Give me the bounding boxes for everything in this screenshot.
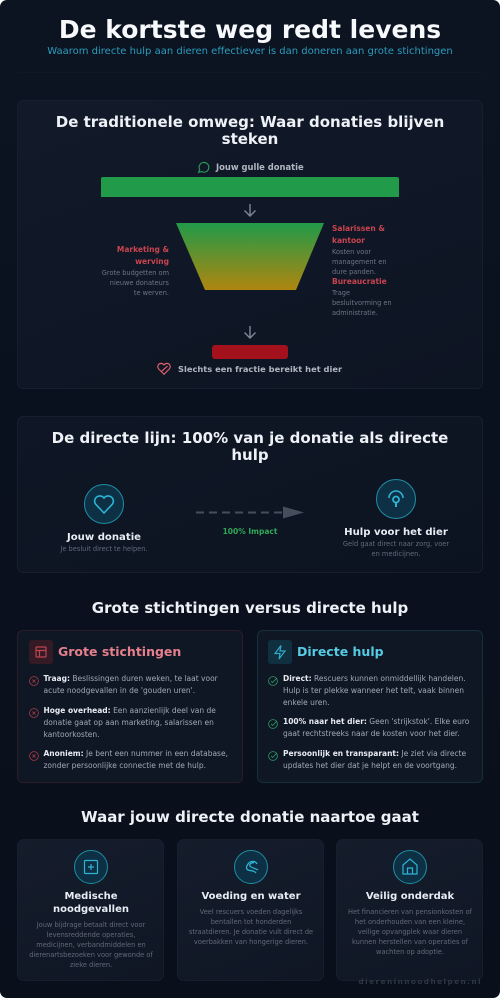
card: medical emergencies: levensreddende operaties, (47, 930, 135, 938)
card: food and water (177, 839, 324, 981)
icon: heart in circle (84, 484, 124, 524)
text: money goes directly: en medicijnen. (372, 550, 420, 558)
item: high overhead: kantoorkosten. (44, 730, 100, 739)
subtitle: Waarom directe hulp aan dieren effectiever is dan doneren aan grote stichtingen (47, 46, 453, 57)
card title: Veilig onderdak (366, 891, 454, 902)
heading: direct help: Directe hulp (297, 644, 384, 659)
card: safe shelter (336, 839, 483, 981)
item: high overhead (29, 706, 216, 739)
heading: direct line (52, 429, 448, 464)
icon: location in circle (376, 479, 416, 519)
callout: salaries and office: dure panden. (332, 268, 376, 276)
card title: Medische (64, 891, 118, 902)
item: high overhead: donatie gaat op aan marketing, salarissen en (44, 718, 214, 727)
card: safe shelter: wachten op adoptie. (376, 948, 444, 956)
callout: salaries and office: kantoor (332, 236, 365, 245)
card title: Voeding en water (201, 891, 301, 902)
remaining fraction bar (212, 345, 288, 359)
card: food and water: voerbakken van hongerige dieren. (194, 938, 308, 946)
callout: salaries and office: Salarissen & (332, 224, 385, 233)
watermark: diereninnoodhelpen.nl (358, 976, 482, 986)
label: your donation: Jouw donatie (67, 532, 141, 542)
icon: lightning bolt (268, 640, 292, 664)
callout: bureaucracy: Bureaucratie (332, 277, 387, 286)
card text: Jouw bijdrage betaalt direct voor (37, 920, 145, 928)
text: money goes directly: Geld gaat direct naar zorg, voer (343, 540, 449, 548)
callout: marketing: Grote budgetten om (102, 269, 169, 277)
icon: layout (29, 640, 53, 664)
card: medical emergencies: zieke dieren. (70, 960, 112, 968)
icon: broken heart (157, 362, 171, 375)
icon: food and water (234, 850, 268, 884)
card: medical emergencies: medicijnen, verbandmiddelen en (36, 940, 146, 948)
arrow: dashed impact arrow (196, 506, 304, 518)
card: medical emergencies: noodgevallen (53, 904, 129, 915)
card: safe shelter: het onderhouden van een kleine, (355, 918, 465, 926)
item: personal and transparent (268, 749, 466, 770)
callout: marketing (102, 245, 169, 297)
callout: bureaucracy: besluitvorming en (332, 299, 392, 307)
heading: direct line: hulp (231, 446, 269, 464)
funnel (176, 223, 324, 290)
item: direct: Hulp is ter plekke wanneer het telt, vaak binnen (283, 686, 464, 695)
full donation bar (101, 177, 399, 197)
callout: bureaucracy: administratie. (332, 309, 378, 317)
text: money goes directly (343, 540, 450, 558)
text: your decision: Je besluit direct te helpen. (60, 545, 148, 553)
callout: salaries and office (332, 224, 387, 276)
item: slow (29, 674, 218, 695)
item: slow: acute noodgevallen in de 'gouden uren'. (44, 686, 195, 695)
icon: speech bubble (198, 162, 210, 174)
heading: traditional detour: De traditionele omweg: Waar donaties blijven (56, 113, 444, 131)
item: slow: Traag: Beslissingen duren weken, te laat voor (44, 674, 218, 683)
callout: salaries and office: Kosten voor (332, 248, 371, 256)
card: medical emergencies: dierenartsbezoeken voor gewonde of (29, 950, 153, 958)
card: medical emergencies (17, 839, 164, 981)
panel: direct line (17, 416, 483, 573)
item: high overhead: Hoge overhead: Een aanzienlijk deel van de (44, 706, 216, 715)
heading: traditional detour (56, 113, 444, 148)
card text: Veel rescuers voeden dagelijks (200, 908, 302, 916)
label: help for the animal: Hulp voor het dier (344, 526, 448, 538)
arrow: down (244, 326, 256, 339)
card: safe shelter: veilige opvangplek waar dieren (358, 928, 462, 936)
card: safe shelter: kunnen herstellen van operaties of (352, 938, 468, 946)
panel: large charities (17, 630, 243, 783)
label: your donation: Jouw gulle donatie (216, 162, 304, 172)
item: personal and transparent: updates het dier dat je helpt en de voortgang. (283, 761, 457, 770)
heading: comparison: Grote stichtingen versus directe hulp (92, 598, 408, 616)
callout: marketing: te werven. (134, 289, 169, 297)
heading: large charities: Grote stichtingen (58, 644, 181, 659)
item: anonymous (29, 749, 228, 770)
heading: where donation goes: Waar jouw directe donatie naartoe gaat (81, 808, 419, 826)
item: direct (268, 674, 466, 707)
callout: marketing: werving (135, 257, 169, 266)
callout: marketing: Marketing & (117, 245, 169, 254)
label: only a fraction: Slechts een fractie bereikt het dier (178, 364, 342, 374)
item: 100% to the animal (268, 717, 469, 738)
callout: salaries and office: management en (332, 258, 387, 266)
panel: direct help (257, 630, 483, 783)
card text: Het financieren van pensionkosten of (348, 908, 472, 916)
card: food and water: bentallen tot honderden (211, 918, 291, 926)
heading: direct line: De directe lijn: 100% van je donatie als directe (52, 429, 448, 447)
card: food and water: straatdieren. Je donatie vult direct de (189, 928, 313, 936)
label: 100% impact: 100% Impact (223, 526, 277, 536)
item: anonymous: zonder persoonlijke connectie met de hulp. (44, 761, 206, 770)
heading: traditional detour: steken (222, 130, 278, 148)
icon: medical cross (74, 850, 108, 884)
callout: marketing: nieuwe donateurs (110, 279, 169, 287)
arrow: down (244, 204, 256, 217)
item: 100% to the animal: gaat rechtstreeks naar de kosten voor het dier. (283, 729, 460, 738)
title: De kortste weg redt levens (59, 15, 441, 44)
item: anonymous: Anoniem: Je bent een nummer in een database, (44, 749, 228, 758)
item: direct: enkele uren. (283, 698, 330, 707)
callout: bureaucracy: Trage (332, 289, 350, 297)
callout: bureaucracy (332, 277, 392, 317)
item: direct: Direct: Rescuers kunnen onmiddellijk handelen. (283, 674, 466, 683)
icon: house (393, 850, 427, 884)
item: 100% to the animal: 100% naar het dier: Geen 'strijkstok'. Elke euro (283, 717, 469, 726)
item: personal and transparent: Persoonlijk en transparant: Je ziet via directe (283, 749, 466, 758)
panel: traditional detour (17, 100, 483, 389)
